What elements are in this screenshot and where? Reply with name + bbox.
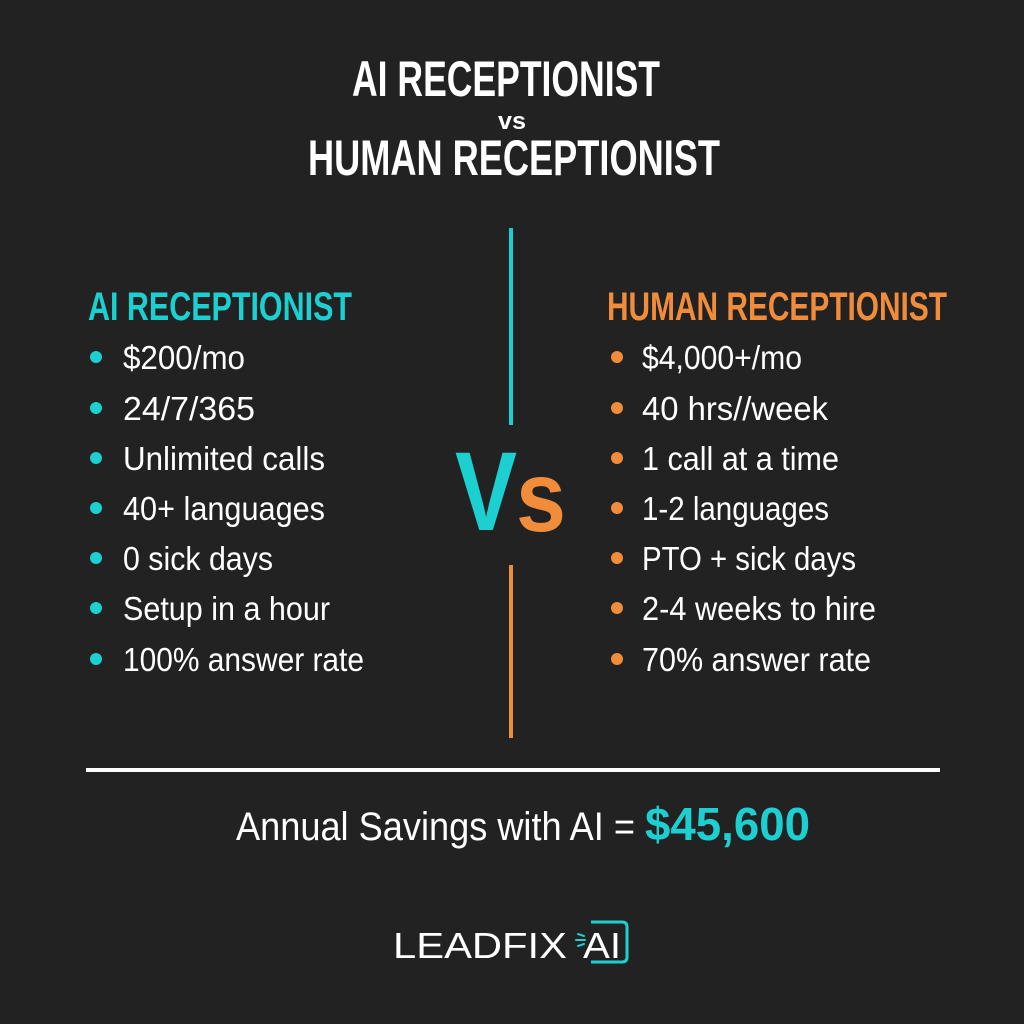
- list: AI: [90, 339, 364, 678]
- list: human: 70% answer rate: [642, 641, 871, 678]
- heading: AI: AI RECEPTIONIST: [88, 285, 352, 329]
- title: HUMAN RECEPTIONIST: [308, 130, 720, 186]
- logo: AI: [583, 925, 621, 966]
- savings callout: [236, 798, 810, 850]
- list: human: 1 call at a time: [642, 440, 839, 477]
- vs badge: [455, 429, 566, 554]
- savings callout: $45,600: [645, 798, 810, 850]
- list: human: [611, 339, 876, 678]
- vs badge: s: [516, 441, 566, 553]
- list: human: 1-2 languages: [642, 490, 829, 527]
- list: human: $4,000+/mo: [642, 339, 802, 376]
- title: [308, 51, 720, 186]
- list: AI: $200/mo: [123, 339, 245, 376]
- title: AI RECEPTIONIST: [352, 51, 660, 107]
- list: AI: 40+ languages: [123, 490, 325, 527]
- list: AI: 0 sick days: [123, 540, 273, 577]
- list: AI: 100% answer rate: [123, 641, 364, 678]
- list: AI: Unlimited calls: [123, 440, 325, 477]
- list: AI: 24/7/365: [123, 390, 255, 427]
- list: human: 2-4 weeks to hire: [642, 590, 876, 627]
- vs badge: V: [455, 429, 517, 554]
- divider: top teal: [509, 228, 513, 425]
- savings callout: Annual Savings with AI =: [236, 805, 635, 849]
- list: AI: Setup in a hour: [123, 590, 330, 627]
- list: human: PTO + sick days: [642, 540, 856, 577]
- logo: [393, 922, 627, 966]
- panel: AI receptionist: [88, 285, 364, 678]
- divider: bottom orange: [509, 565, 513, 738]
- panel: human receptionist: [607, 285, 947, 678]
- logo: LEADFIX: [393, 925, 567, 966]
- title: vs: [498, 108, 526, 135]
- list: human: 40 hrs//week: [642, 390, 828, 427]
